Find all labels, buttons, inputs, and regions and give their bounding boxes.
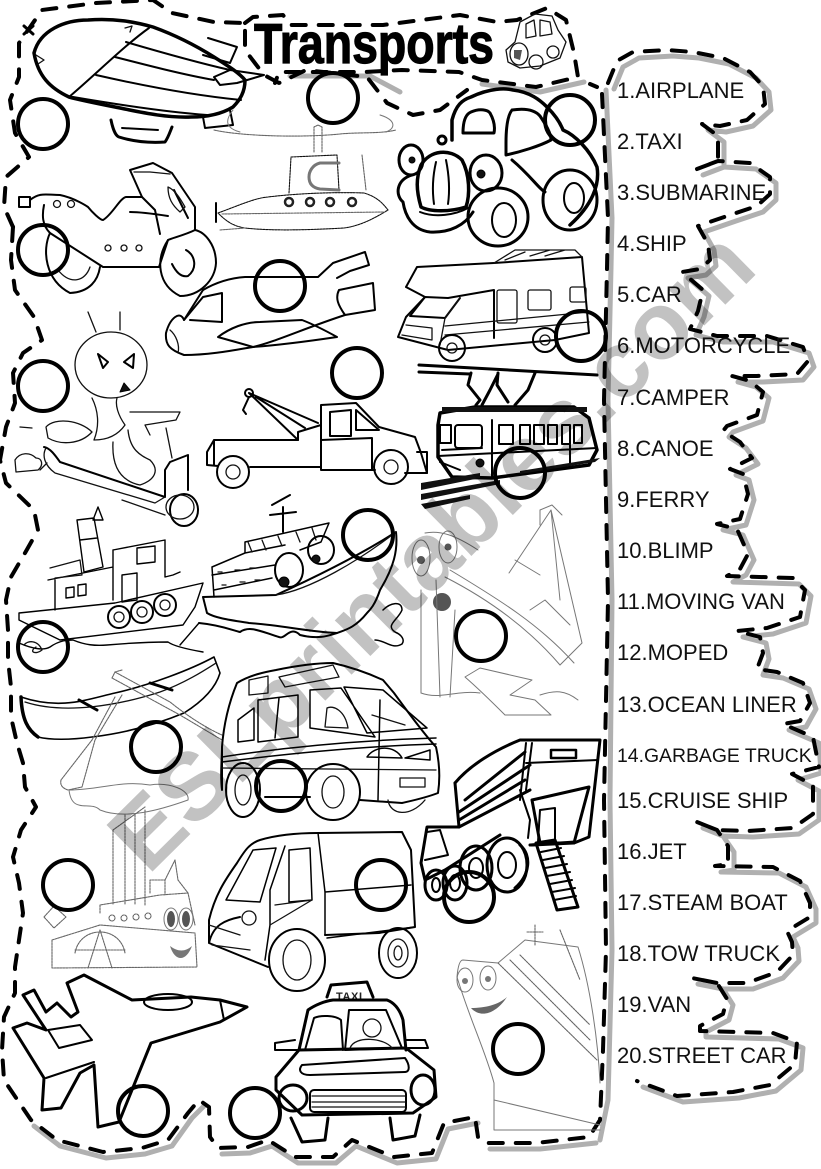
word list: 6.MOTORCYCLE	[617, 333, 790, 358]
vehicle: submarine	[214, 110, 396, 230]
vehicle: taxi	[275, 982, 436, 1142]
word list: 11.MOVING VAN	[617, 589, 785, 614]
vehicle: fighter jet	[13, 975, 247, 1127]
icon: small car beside title	[506, 14, 566, 69]
vehicle: tow truck	[207, 389, 427, 488]
vehicle: car	[398, 89, 598, 246]
word list: 4.SHIP	[617, 231, 687, 256]
watermark: ESLprintables.com	[88, 210, 774, 891]
vehicle: moped with bird	[15, 312, 198, 526]
word list: 5.CAR	[617, 282, 682, 307]
vehicle: blimp	[34, 19, 264, 142]
vehicle: van	[209, 832, 417, 991]
vehicle: motorcycle	[19, 163, 216, 296]
word list: 7.CAMPER	[617, 385, 729, 410]
vehicle: steam boat	[19, 507, 203, 653]
vehicle: ferry	[199, 495, 403, 646]
word list: 2.TAXI	[617, 129, 683, 154]
dashed cut-out outline: picture sheet	[0, 0, 612, 1163]
dashed cloud outline: word list	[608, 50, 821, 1102]
vehicle: large ship with smile	[457, 925, 600, 1130]
word list: 8.CANOE	[617, 436, 714, 461]
vehicle: jet	[166, 252, 375, 355]
title: Transports	[254, 12, 494, 76]
word list: 3.SUBMARINE	[617, 180, 766, 205]
vehicle: cruise ship	[44, 807, 197, 968]
word list: 14.GARBAGE TRUCK	[617, 745, 812, 767]
word list: 19.VAN	[617, 992, 691, 1017]
word list: 18.TOW TRUCK	[617, 941, 780, 966]
vehicle: moving van	[221, 663, 439, 820]
word list: 1.AIRPLANE	[617, 78, 744, 103]
vehicle: camper	[398, 250, 589, 361]
word list: 15.CRUISE SHIP	[617, 788, 788, 813]
word list: 12.MOPED	[617, 640, 728, 665]
word list: 10.BLIMP	[617, 538, 714, 563]
vehicle: canoe	[21, 657, 222, 814]
word list: 17.STEAM BOAT	[617, 890, 788, 915]
vehicle: street car	[419, 365, 600, 509]
vehicle: garbage truck	[421, 740, 600, 910]
word list	[617, 78, 812, 1068]
answer circles	[18, 73, 606, 1138]
word list: 16.JET	[617, 839, 687, 864]
vehicle: ocean liner	[412, 505, 582, 715]
sign: taxi: TAXI	[336, 991, 362, 1003]
word list: 9.FERRY	[617, 487, 710, 512]
word list: 20.STREET CAR	[617, 1043, 787, 1068]
word list: 13.OCEAN LINER	[617, 692, 797, 717]
